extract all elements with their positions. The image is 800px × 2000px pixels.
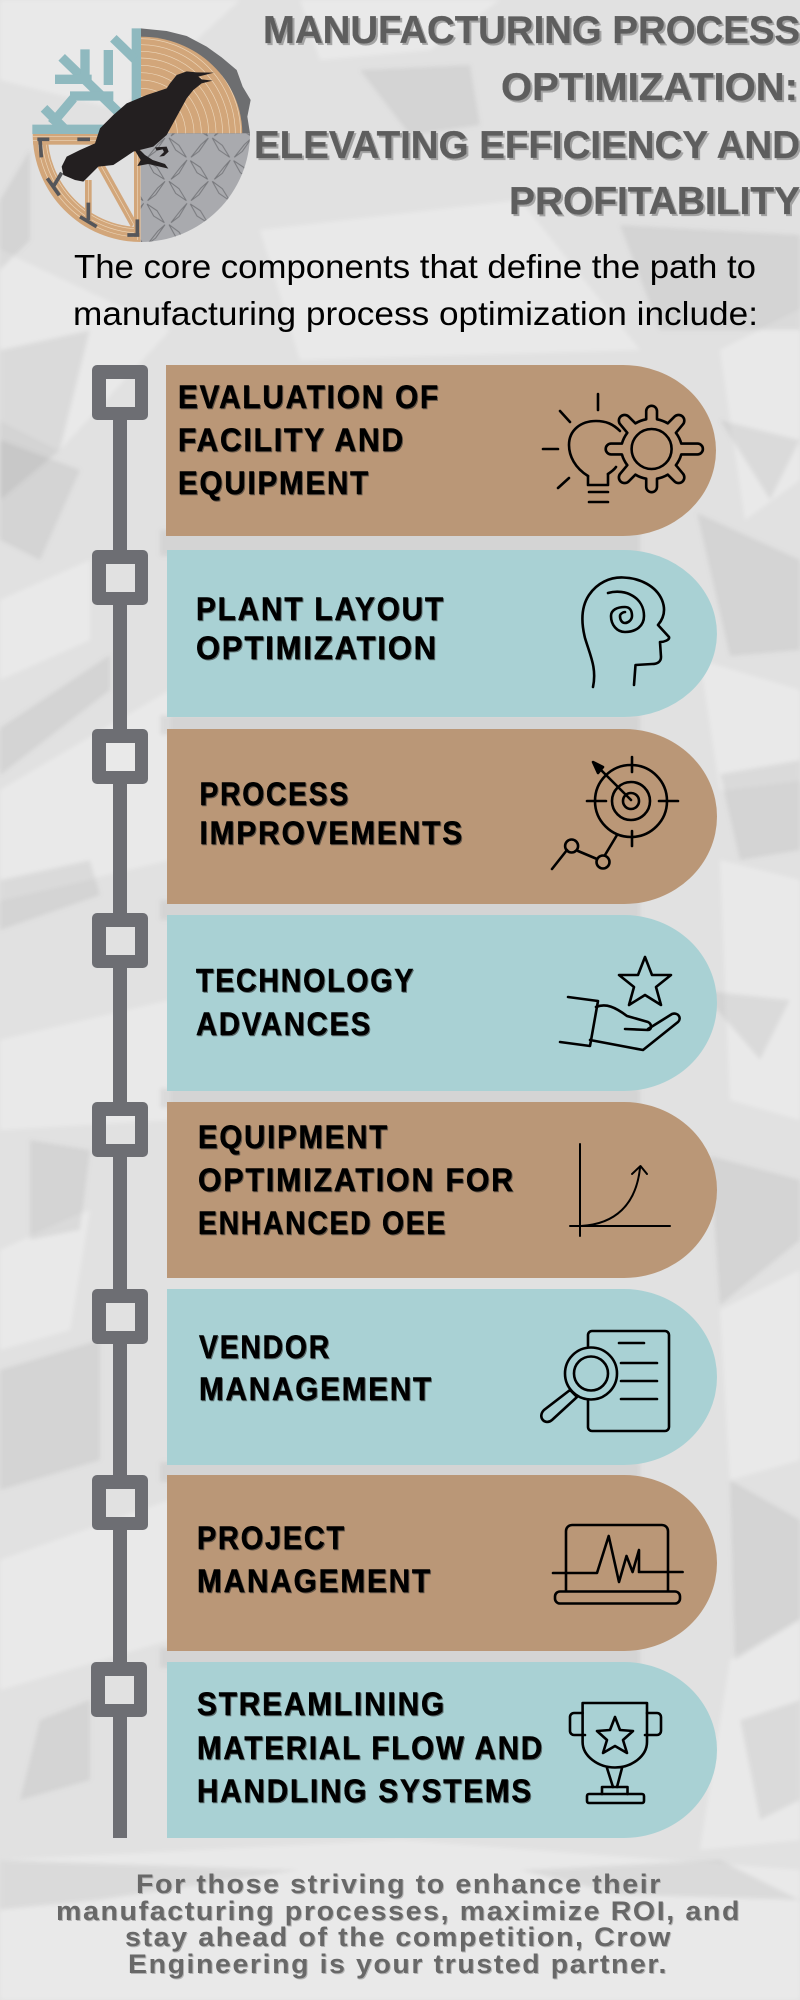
node 6 — [92, 1289, 148, 1344]
closing text: Engineering is your trusted partner. — [128, 1949, 668, 1979]
title — [254, 9, 800, 223]
logo diamond plate — [141, 133, 251, 243]
icon: growth chart — [570, 1144, 670, 1236]
logo snowflake — [32, 28, 141, 133]
panel: process improvements — [167, 729, 717, 904]
panel: vendor management — [167, 1289, 717, 1465]
closing text: manufacturing processes, maximize ROI, and — [56, 1896, 741, 1926]
heading: MANAGEMENT — [197, 1563, 432, 1599]
heading: OPTIMIZATION FOR — [198, 1162, 515, 1198]
closing text — [56, 1869, 741, 1979]
heading: MANAGEMENT — [199, 1371, 433, 1407]
heading: VENDOR — [199, 1329, 331, 1365]
heading — [196, 591, 445, 666]
logo truss — [33, 133, 141, 242]
intro text: The core components that define the path to — [74, 248, 756, 285]
heading: IMPROVEMENTS — [200, 815, 464, 851]
heading — [200, 776, 464, 851]
title: OPTIMIZATION: — [501, 66, 798, 109]
panel: equipment optimization for enhanced OEE — [167, 1102, 717, 1278]
heading: ENHANCED OEE — [198, 1205, 447, 1241]
heading: OPTIMIZATION — [196, 630, 438, 666]
icon: head with spiral — [582, 577, 669, 687]
node 3 — [92, 729, 148, 784]
panel: plant layout optimization — [167, 550, 717, 717]
timeline chain — [91, 365, 148, 1838]
heading — [198, 1119, 515, 1241]
closing text: stay ahead of the competition, Crow — [125, 1922, 672, 1952]
heading: MATERIAL FLOW AND — [197, 1730, 544, 1766]
intro text: manufacturing process optimization include: — [73, 295, 758, 332]
node 7 — [92, 1475, 148, 1530]
logo crow — [62, 71, 214, 182]
heading — [199, 1329, 433, 1407]
intro text — [73, 248, 758, 332]
heading: TECHNOLOGY — [196, 962, 415, 998]
heading: PROCESS — [200, 776, 350, 812]
logo bark — [141, 28, 251, 133]
node 8 — [91, 1662, 147, 1717]
panel: technology advances — [167, 915, 717, 1091]
panel: evaluation of facility and equipment — [166, 365, 716, 536]
icon: hand holding star — [560, 957, 680, 1050]
logo wood rings — [141, 36, 242, 134]
heading — [197, 1520, 432, 1599]
node 5 — [92, 1102, 148, 1157]
title: PROFITABILITY — [509, 180, 800, 223]
heading: EQUIPMENT — [198, 1119, 389, 1155]
heading: EQUIPMENT — [178, 465, 370, 501]
icon: laptop with pulse — [553, 1525, 683, 1604]
heading: PROJECT — [197, 1520, 346, 1556]
icon: document and magnifier — [541, 1331, 669, 1431]
heading: STREAMLINING — [197, 1686, 446, 1722]
panel: project management — [167, 1475, 717, 1651]
heading: FACILITY AND — [178, 422, 405, 458]
node 1 — [92, 365, 148, 420]
icon: trophy — [570, 1703, 661, 1803]
panel: streamlining material flow and handling systems — [167, 1662, 717, 1838]
heading: PLANT LAYOUT — [196, 591, 445, 627]
icon: lightbulb and gear — [543, 394, 703, 502]
heading — [197, 1686, 544, 1809]
closing text: For those striving to enhance their — [136, 1869, 662, 1899]
heading: HANDLING SYSTEMS — [197, 1773, 533, 1809]
node 4 — [92, 913, 148, 968]
heading — [178, 379, 440, 501]
node 2 — [92, 550, 148, 605]
heading: ADVANCES — [196, 1006, 372, 1042]
logo: crow engineering emblem — [32, 28, 251, 243]
heading — [196, 962, 415, 1042]
icon: target with arrow and graph — [552, 757, 678, 869]
title: MANUFACTURING PROCESS — [263, 9, 800, 52]
title: ELEVATING EFFICIENCY AND — [254, 124, 800, 167]
heading: EVALUATION OF — [178, 379, 440, 415]
